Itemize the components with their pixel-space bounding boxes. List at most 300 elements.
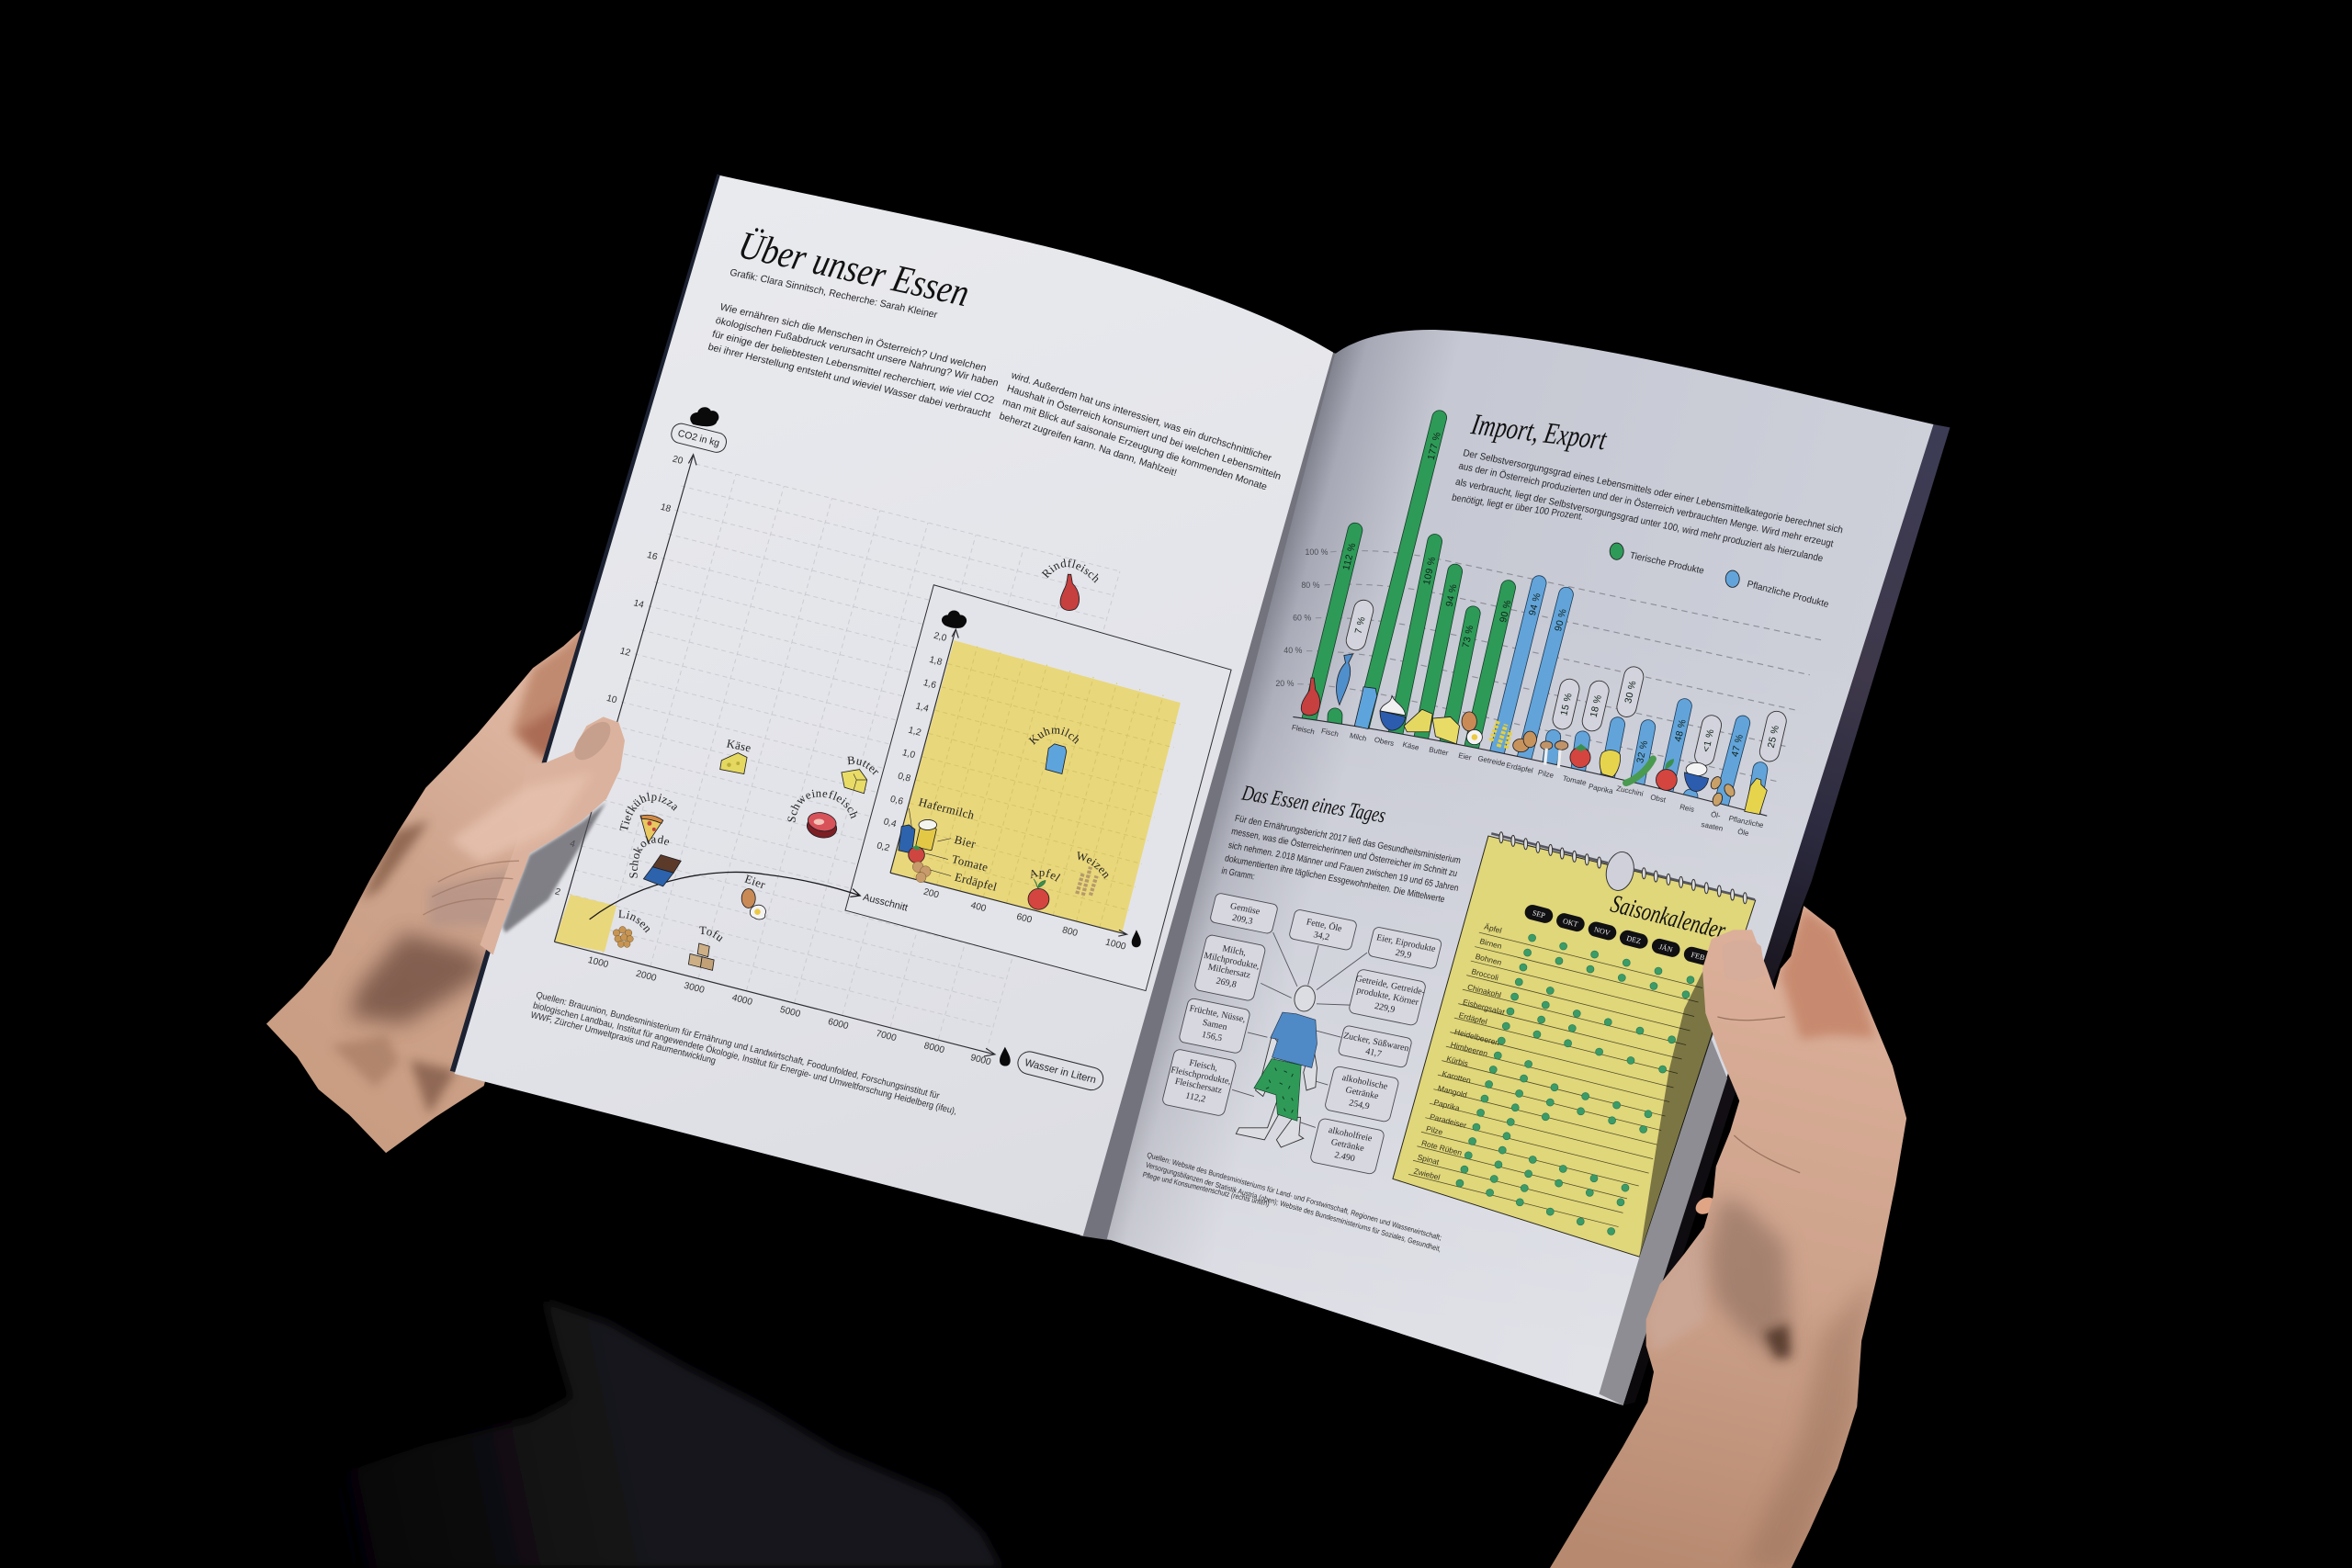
intro text column 2: man mit Blick auf saisonale Erzeugung die kommenden Monate [1001, 396, 1269, 493]
text block: dokumentierten ihre täglichen Essgewohnheiten. Die Mittelwerte [1224, 853, 1446, 905]
chart percentage labels [1275, 547, 1329, 688]
box: alkoholische Getränke: alkoholische [1340, 1073, 1389, 1092]
bar value labels: 48 % [1673, 718, 1689, 743]
box: Früchte [1178, 998, 1250, 1054]
text block: messen, was die Österreicherinnen und Österreicher im Schnitt zu [1230, 825, 1459, 879]
row labels: Spinat [1417, 1152, 1441, 1167]
x axis ticks: 9000 [969, 1053, 992, 1067]
inset y ticks [876, 631, 948, 854]
row labels: Zwiebel [1413, 1167, 1442, 1182]
box: Fette, Öle: Fette, Öle [1306, 916, 1343, 934]
arrow: Ausschnitt [590, 872, 860, 919]
spiral binding [1491, 832, 1755, 904]
bar: Paprika [1605, 725, 1618, 789]
upper edge shadow [361, 820, 429, 900]
x axis ticks: 7000 [875, 1029, 898, 1043]
bar icons [1301, 654, 1767, 815]
bars [1307, 418, 1760, 818]
bar value labels: 90 % [1554, 608, 1569, 633]
shirt [1271, 1012, 1317, 1067]
sources: right page: Pflege und Konsumentenschutz (rechts unten) [1142, 1170, 1271, 1208]
box: Fette, Öle: 34,2 [1312, 930, 1330, 942]
label: CO2 in kg [669, 422, 729, 454]
title: Import, Export: Import, Export [1468, 408, 1610, 457]
icon: cheese [1404, 709, 1432, 732]
chart percentage labels: 20 % [1275, 679, 1295, 688]
pills: values above small bars: 15 % [1559, 692, 1575, 716]
season dots [1456, 934, 1694, 1235]
inset x ticks: 400 [969, 900, 988, 914]
x axis ticks: 5000 [779, 1005, 802, 1020]
box: Zucker: Zucker, Süßwaren [1342, 1031, 1410, 1054]
page: left [454, 175, 1334, 1236]
bar value labels: 109 % [1422, 556, 1438, 586]
intro text: self-sufficiency: benötigt, liegt er über 100 Prozent. [1451, 492, 1585, 523]
item: Hafermilch [899, 795, 976, 853]
axis baseline [1293, 716, 1767, 816]
legend [1610, 543, 1830, 610]
pills: values above small bars [1344, 598, 1788, 768]
box: Gemüse: Gemüse [1229, 901, 1261, 917]
sources: left page: Quellen: Brauunion, Bundesministerium für Ernährung und Landwirtschaft, Foodunfolded, Forschungsinstitut für [535, 990, 941, 1101]
inset x ticks: 1000 [1104, 937, 1127, 953]
icon: potatoes [1513, 731, 1536, 752]
category labels: Öl- [1710, 810, 1722, 820]
y axis ticks: 8 [594, 743, 603, 754]
month pills: OKT [1562, 917, 1579, 929]
item: Schokolade: Schokolade [629, 835, 669, 878]
bar value labels [1341, 431, 1746, 764]
item: Linsen [613, 908, 654, 947]
box: Zucker: 41,7 [1364, 1046, 1383, 1059]
month pills: NOV [1593, 925, 1611, 937]
inset grid [890, 640, 1186, 933]
thumb knuckle highlight [450, 773, 593, 863]
hand shading, clipped to hand outline [1646, 908, 1876, 1568]
item: Erdäpfel: Erdäpfel [954, 871, 999, 894]
thumb shadow on left page [503, 803, 606, 933]
item: Linsen: Linsen [618, 909, 650, 933]
bar: Ölsaaten [1719, 723, 1743, 813]
box: Milch: Milchersatz [1206, 962, 1252, 981]
row labels: Bohnen [1475, 952, 1503, 967]
item: Butter [841, 757, 878, 794]
y axis [554, 455, 696, 942]
icon: butter [1432, 716, 1460, 744]
y axis ticks: 6 [581, 791, 589, 802]
bar value labels: 47 % [1730, 733, 1746, 758]
y axis ticks: 2 [554, 886, 561, 897]
inset y ticks: 1,6 [922, 678, 937, 691]
month pills: SEP [1532, 908, 1546, 920]
icon: mushrooms [1541, 741, 1568, 768]
skirt [1254, 1059, 1301, 1121]
label: Wasser in Litern [1015, 1049, 1106, 1092]
darkest shadow at wrist [1764, 1325, 1791, 1359]
item: Erdäpfel [912, 862, 999, 894]
icon: eggs [1462, 712, 1482, 745]
thumb base creases [423, 861, 519, 915]
row labels: Paradeiser [1429, 1111, 1468, 1130]
left page spine edge [450, 174, 726, 1074]
person illustration [1236, 984, 1317, 1147]
inset y ticks: 0,2 [876, 840, 891, 854]
row labels: Äpfel [1483, 922, 1503, 935]
bar: Tomate [1577, 739, 1582, 783]
row labels: Birnen [1478, 936, 1503, 951]
thumb crease lines [1717, 1017, 1800, 1173]
row labels: Heidelbeeren [1453, 1027, 1501, 1047]
intro text: self-sufficiency: Der Selbstversorgungsgrad eines Lebensmittels oder einer Lebensmittelkategorie berechnet sich [1462, 447, 1844, 536]
chart: CO2 vs water scatter plot [553, 407, 1232, 1091]
bar value labels: 94 % [1445, 583, 1459, 608]
wrist edge shade [1740, 1275, 1876, 1568]
lower stripe shadow [411, 1060, 456, 1114]
inset y ticks: 0,4 [882, 817, 898, 829]
bar value labels: 32 % [1635, 739, 1650, 764]
row labels: Erdäpfel [1458, 1010, 1488, 1026]
row labels: Rote Rüben [1420, 1138, 1464, 1157]
item: Tomate [909, 845, 989, 874]
item: Kuhmilch: Kuhmilch [1029, 728, 1079, 745]
y axis ticks: 18 [660, 502, 673, 514]
calendar sheet [1393, 836, 1756, 1257]
inset x ticks: 600 [1015, 912, 1034, 926]
icon: cloud [690, 407, 718, 426]
icon: tomato [1570, 744, 1590, 768]
row labels: Karotten [1441, 1069, 1472, 1085]
lower fingers [1646, 1227, 1705, 1353]
arms [1256, 1035, 1317, 1097]
bar value labels: 112 % [1341, 542, 1358, 571]
category labels: saaten [1701, 820, 1724, 833]
bar: Käse [1419, 571, 1455, 749]
label: Wasser in Litern: Wasser in Litern [1023, 1057, 1097, 1086]
pills: values above small bars: 25 % [1767, 724, 1781, 749]
item: Bier: Bier [953, 833, 978, 851]
bar: Eier [1468, 588, 1509, 761]
x axis ticks: 2000 [635, 969, 658, 984]
inset y ticks: 1,2 [907, 726, 922, 739]
item: Tiefkühlpizza [619, 792, 677, 843]
palm shadow [332, 1035, 399, 1088]
month pills [1523, 903, 1713, 966]
pills: values above small bars: 30 % [1623, 680, 1639, 705]
left thumbnail [568, 716, 617, 766]
category labels: Obers [1374, 736, 1395, 748]
category labels: Käse [1402, 740, 1420, 752]
icon: inset cloud [942, 611, 967, 628]
item: Käse [719, 739, 751, 774]
sleeve: dark sweater [258, 1301, 1002, 1568]
right thumbnail [1722, 940, 1766, 980]
bar: Fisch [1329, 716, 1340, 735]
item: Käse: Käse [726, 739, 751, 751]
back of hand shadow [1709, 1197, 1791, 1359]
item: Schweinefleisch: Schweinefleisch [788, 790, 858, 823]
box: Gemüse: 209,3 [1231, 913, 1254, 927]
x axis ticks: 3000 [683, 981, 706, 996]
category labels: Milch [1349, 731, 1367, 743]
bar: Milch [1360, 418, 1440, 737]
item: Weizen [1075, 849, 1114, 896]
inset y ticks: 1,8 [928, 655, 944, 668]
item: Tiefkühlpizza: Tiefkühlpizza [619, 792, 677, 830]
pills: values above small bars: <1 % [1702, 728, 1716, 753]
skirt pattern [1266, 1067, 1293, 1112]
item: Butter: Butter [847, 757, 878, 775]
icon: zucchini [1626, 759, 1653, 783]
panel: Saisonkalender [1393, 832, 1756, 1405]
icon: rice bowl [1684, 762, 1709, 791]
bar: Fleisch [1307, 530, 1355, 726]
chart percentage labels: 100 % [1306, 547, 1329, 557]
y axis ticks: 16 [646, 550, 659, 562]
icon: bowl [1380, 711, 1406, 730]
chart percentage labels: 60 % [1293, 613, 1311, 622]
intro text: self-sufficiency: aus der in Österreich produzierten und der in Österreich verbrauchten Menge. Wird mehr erzeugt [1457, 460, 1835, 549]
box: Früchte: Früchte, Nüsse, [1188, 1004, 1247, 1025]
x axis ticks: 1000 [587, 955, 610, 970]
bar: Erdäpfel [1521, 594, 1566, 771]
calendar title: Saisonkalender [1608, 889, 1729, 944]
text block: sich nehmen. 2.018 Männer und Frauen zwischen 19 und 65 Jahren [1227, 840, 1460, 894]
item: Apfel: Apfel [1031, 869, 1060, 882]
icon: paprika [1600, 750, 1621, 777]
inset y ticks: 0,8 [897, 772, 912, 784]
box: Früchte: 156,5 [1201, 1030, 1223, 1043]
box: Fleisch [1161, 1049, 1237, 1116]
row labels: Broccoli [1470, 966, 1499, 982]
x axis ticks: 8000 [922, 1041, 945, 1055]
item: Schweinefleisch [785, 787, 861, 840]
month pills: JÄN [1658, 942, 1674, 954]
y axis ticks: 10 [605, 694, 618, 705]
bar: Obers [1394, 541, 1435, 744]
box: Milch: Milch, [1221, 943, 1247, 958]
bar: Butter [1444, 614, 1473, 754]
item: Kuhmilch [1029, 728, 1079, 774]
index finger shading [1781, 908, 1875, 1039]
row labels: Himbeeren [1450, 1040, 1489, 1058]
finger peeking behind the book [1692, 1194, 1718, 1217]
y axis ticks: 20 [672, 454, 684, 467]
left hand behind the booklet [266, 621, 600, 1153]
bar value labels: 90 % [1498, 599, 1513, 624]
y axis ticks: 12 [618, 646, 632, 659]
icon: apple [1656, 759, 1677, 790]
y axis ticks [554, 454, 684, 897]
box: Getreide: produkte, Körner [1355, 986, 1420, 1008]
category labels: Pilze [1537, 768, 1555, 780]
chart percentage labels: 80 % [1301, 581, 1320, 590]
sources: right page: Versorgungsbilanzen der Statistik Austria (oben); Website des Bundesministeriums für Soziales, Gesundheit, [1145, 1160, 1442, 1254]
row lines [1408, 932, 1702, 1227]
category labels: Fleisch [1291, 723, 1316, 736]
category labels: Zucchini [1615, 784, 1645, 798]
item: Tofu: Tofu [699, 926, 722, 942]
box: Früchte: Samen [1202, 1018, 1228, 1032]
inset y ticks: 0,6 [889, 795, 905, 807]
icon: inset water drop [1132, 930, 1141, 947]
inset y ticks: 1,0 [901, 748, 917, 761]
chart grid [554, 462, 1120, 1051]
box: Eier, Eiprodukte: 29,9 [1395, 948, 1412, 961]
sources: left page: biologischen Landbau, Institut für angewendete Ökologie, Institut für Energie- und Umweltforschung Heidelberg (ifeu), [532, 1000, 958, 1117]
credit line: Grafik: Clara Sinnitsch, Recherche: Sarah Kleiner [729, 267, 939, 321]
icon: fish [1337, 654, 1353, 705]
item: Weizen: Weizen [1077, 852, 1108, 879]
item: Bier [915, 819, 978, 851]
pills: values above small bars: 18 % [1589, 694, 1604, 718]
intro text column 2: Haushalt in Österreich konsumiert und bei welchen Lebensmitteln [1005, 383, 1283, 482]
category labels: Paprika [1588, 783, 1614, 795]
panel: inset cutout [845, 585, 1231, 991]
finger shading [509, 630, 581, 762]
intro text column 2: wird. Außerdem hat uns interessiert, was ein durchschnittlicher [1009, 369, 1273, 464]
thumb shadow on calendar [1639, 969, 1728, 1256]
box: alkoholfreie Getränke: Getränke [1329, 1137, 1365, 1154]
icon: milk carton [1354, 687, 1377, 728]
title: Über unser Essen: Über unser Essen [734, 223, 974, 315]
box: Getreide: 229,9 [1374, 1001, 1396, 1015]
row labels: Mangold [1437, 1083, 1468, 1100]
icon: seeds [1709, 775, 1736, 807]
intro text column 2: beherzt zugreifen kann. Na dann, Mahlzeit! [998, 411, 1178, 479]
legend: Tierische Produkte [1629, 551, 1705, 577]
intro text column 1 [707, 301, 1000, 421]
box: alkoholfreie Getränke: alkoholfreie [1328, 1125, 1374, 1144]
icon: water drop [1000, 1047, 1011, 1066]
bar: Reis [1685, 796, 1695, 810]
highlighted cutout square [554, 895, 616, 952]
item: Tomate: Tomate [950, 852, 989, 874]
category labels: Butter [1428, 745, 1450, 758]
box: Fette, Öle [1288, 909, 1358, 951]
inset yellow area [890, 640, 1181, 933]
category labels: Reis [1679, 803, 1695, 814]
category labels: Pflanzliche [1728, 814, 1765, 829]
label: Ausschnitt: Ausschnitt [862, 892, 909, 914]
thumb shadow on page [1599, 1039, 1727, 1405]
inset y axis [890, 629, 958, 873]
chart gridlines [1297, 551, 1821, 782]
box: Fleisch: Fleischersatz [1174, 1077, 1224, 1096]
intro text column 1: bei ihrer Herstellung entsteht und wieviel Wasser dabei verbraucht [707, 342, 992, 421]
month pills: FEB [1690, 951, 1706, 962]
chart percentage labels: 40 % [1283, 646, 1303, 655]
y axis ticks: 4 [569, 839, 577, 850]
icon: wheat [1491, 720, 1510, 749]
box: Fleisch: Fleisch, [1188, 1058, 1218, 1074]
inset x ticks [922, 887, 1127, 953]
icon: bowl of cream [1380, 696, 1406, 716]
text block: Für den Ernährungsbericht 2017 ließ das Gesundheitsministerium [1234, 814, 1462, 866]
left thumb [423, 716, 625, 955]
bar: Getreide [1494, 583, 1539, 765]
x axis [554, 942, 995, 1056]
box: alkoholfreie Getränke [1309, 1118, 1385, 1175]
bar: Pflanzliche Öle [1752, 770, 1760, 818]
connector lines [1232, 932, 1367, 1127]
x axis ticks: 4000 [730, 993, 753, 1008]
hand shading, clipped to hand outline [332, 621, 591, 1114]
item: Rindfleisch: Rindfleisch [1042, 558, 1099, 583]
legend: Pflanzliche Produkte [1746, 580, 1830, 610]
calendar hole [1603, 850, 1637, 893]
row labels: Chinakohl [1466, 982, 1502, 999]
box: alkoholische Getränke: 254,9 [1348, 1098, 1371, 1111]
item: Eier [741, 873, 767, 919]
box: Eier, Eiprodukte: Eier, Eiprodukte [1375, 932, 1437, 954]
category labels: Fisch [1320, 727, 1340, 739]
row labels: Kürbis [1445, 1054, 1469, 1068]
intro text column 1: für einige der beliebtesten Lebensmittel recherchiert, wie viel CO2 [711, 329, 996, 406]
month pills: DEZ [1625, 934, 1642, 945]
category labels: Tomate [1562, 774, 1588, 787]
text block [1220, 814, 1462, 905]
item: Rindfleisch [1042, 558, 1099, 611]
right hand with thumb [1550, 906, 1906, 1568]
heading: Das Essen eines Tages [1239, 782, 1388, 828]
row labels [1413, 922, 1507, 1182]
row labels: Eisbergsalat [1462, 998, 1507, 1017]
bar value labels: 94 % [1528, 592, 1544, 616]
box: Fleisch: Fleischprodukte, [1170, 1065, 1232, 1087]
category labels: Eier [1457, 751, 1473, 762]
box: Zucker [1338, 1025, 1412, 1068]
category labels: Erdäpfel [1505, 761, 1534, 775]
category labels [1291, 723, 1765, 838]
box: Getreide: Getreide, Getreide- [1354, 974, 1426, 998]
sources: right page: Quellen: Website des Bundesministeriums für Land- und Forstwirtschaft, Regionen und Wasserwirtschaft; [1146, 1151, 1442, 1242]
intro text: self-sufficiency: als verbraucht, liegt der Selbstversorgungsgrad unter 100, wird mehr produziert als hierzulande [1454, 477, 1825, 564]
pills: values above small bars: 7 % [1353, 615, 1368, 635]
page: right [423, 330, 1933, 1568]
bar value labels: 177 % [1427, 431, 1443, 461]
x axis ticks: 6000 [827, 1017, 850, 1032]
category labels: Öle [1736, 828, 1750, 838]
item: Apfel [1027, 866, 1063, 909]
bar value labels: 73 % [1461, 625, 1476, 649]
box: Milch: Milchprodukte, [1203, 951, 1261, 972]
box: Milch [1193, 934, 1266, 1001]
y axis ticks: 14 [632, 598, 645, 611]
item: Tofu [688, 924, 727, 970]
intro text column 1: Wie ernähren sich die Menschen in Österreich? Und welchen [718, 301, 988, 374]
row labels: Pilze [1425, 1123, 1444, 1137]
text block: in Gramm: [1220, 866, 1256, 882]
x axis ticks [587, 955, 992, 1067]
label: CO2 in kg: CO2 in kg [676, 429, 720, 449]
inset x ticks: 200 [922, 887, 940, 900]
back cover edge [1623, 424, 1950, 1405]
box: Milch: 269,8 [1215, 976, 1238, 990]
box: alkoholische Getränke: Getränke [1344, 1085, 1380, 1101]
deep crease between finger and thumb [517, 705, 562, 758]
sources: left page: WWF, Zürcher Umweltpraxis und Raumentwicklung [529, 1010, 717, 1066]
box: Getreide [1348, 968, 1428, 1026]
bar: Obst [1664, 706, 1684, 801]
bar: Pilze [1548, 737, 1554, 777]
box: Eier, Eiprodukte [1367, 927, 1442, 969]
box: Fleisch: 112,2 [1184, 1091, 1206, 1105]
category labels: Obst [1649, 793, 1668, 805]
item: Eier: Eier [744, 874, 765, 889]
gutter [1080, 353, 1338, 1240]
hand midtone [429, 868, 514, 926]
row labels: Paprika [1432, 1098, 1461, 1113]
